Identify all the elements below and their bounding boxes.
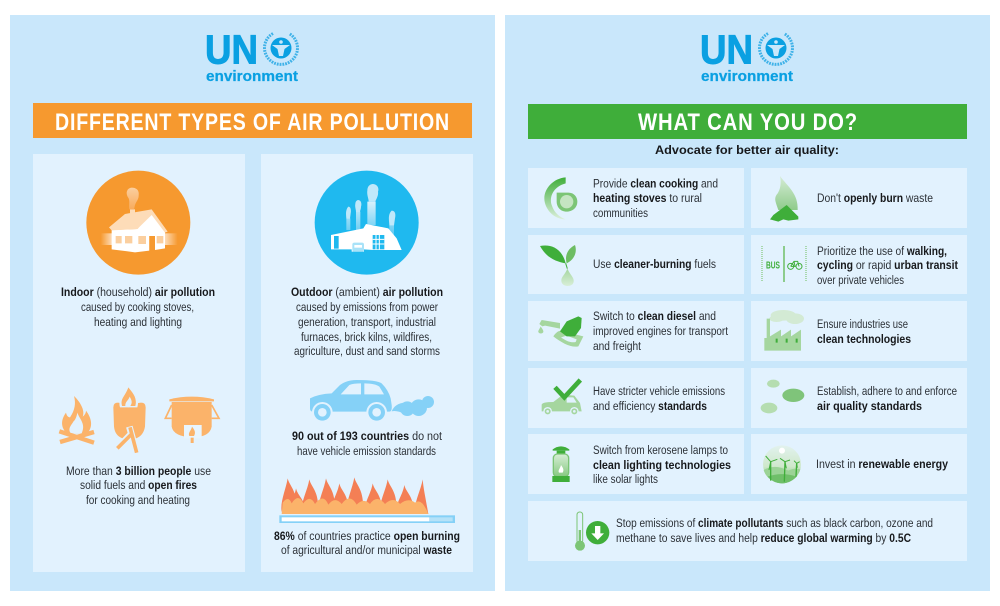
icons: solid fuel fires [59,385,219,453]
icon: bus and bicycle lanes: BUS [766,260,780,271]
action card: renewable energy [751,434,967,494]
text: open burning: 86% of countries practice open burning [274,529,460,543]
action card: walking and cycling [751,235,967,294]
action card: clean diesel: Switch to clean diesel and [593,309,716,323]
text: indoor air pollution [61,285,215,329]
text: open burning [274,529,460,557]
action card: renewable energy: Invest in renewable energy [816,457,948,471]
action card: clean lighting: Switch from kerosene lamps to [593,443,728,457]
icon: factory in blue circle [315,171,419,275]
icon: fuel nozzle [538,316,583,347]
text: open burning: of agricultural and/or municipal waste [281,543,452,557]
icon: factory [764,310,804,351]
UN environment logo: environment [701,68,793,85]
text: 3 billion people: More than 3 billion people use [66,464,211,478]
icon: clean stove [544,177,577,219]
text: outdoor air pollution: furnaces, brick kilns, wildfires, [301,330,432,344]
icon: stove with flame [113,385,146,453]
text: 3 billion people: for cooking and heating [86,493,190,507]
text: 3 billion people: solid fuels and open fires [80,478,197,492]
text: outdoor air pollution: agriculture, dust and sand storms [294,344,440,358]
icon: flames on progress bar [279,477,455,523]
text: indoor air pollution: caused by cooking stoves, [81,300,194,314]
heading banner: different types of air pollution [33,103,472,138]
subheading: advocate: Advocate for better air quality: [655,143,839,157]
panel: outdoor air pollution [261,154,473,572]
UN environment logo [205,26,298,85]
action card: air quality standards [751,368,967,428]
action card: clean diesel: and freight [593,339,642,353]
action card: climate pollutants: Stop emissions of climate pollutants such as black carbon, ozone and [616,516,933,530]
action card: air quality standards: Establish, adhere to and enforce [817,384,957,398]
heading banner: different types of air pollution: DIFFERENT TYPES OF AIR POLLUTION [55,109,450,136]
text: 3 billion people [66,464,211,507]
action card: air quality standards: air quality standards [817,399,922,413]
icon: burning pile [770,176,798,222]
UN environment logo: UN [700,26,753,72]
action card: vehicle standards: and efficiency standards [593,399,707,413]
icon: clouds [761,380,804,413]
action card: walking and cycling: over private vehicles [817,273,904,287]
action card: clean lighting: clean lighting technologies [593,458,731,472]
action card: open burning [751,168,967,228]
text: vehicle emission standards [292,429,443,458]
icon: campfire [59,396,94,443]
heading banner: what can you do [528,104,967,139]
icon: lantern [552,446,570,482]
icon: cooking pot [165,397,219,443]
action card: climate pollutants [528,501,967,561]
text: indoor air pollution: heating and lighting [94,315,182,329]
text: outdoor air pollution: Outdoor (ambient) air pollution [291,285,443,299]
text: vehicle emission standards: have vehicle emission standards [297,444,436,458]
action card: walking and cycling: Prioritize the use of walking, [817,244,947,258]
action card: vehicle standards: Have stricter vehicle emissions [593,384,725,398]
icon: bus and bicycle lanes [762,246,806,282]
icon: car with exhaust [310,380,434,423]
action card: clean lighting: like solar lights [593,472,658,486]
action card: cleaner fuels [528,235,744,294]
panel: indoor air pollution [33,154,245,572]
text: outdoor air pollution: generation, transport, industrial [298,315,436,329]
action card: clean cooking: Provide clean cooking and [593,176,718,190]
text: indoor air pollution: Indoor (household) air pollution [61,285,215,299]
text: outdoor air pollution: caused by emissions from power [296,300,438,314]
UN environment logo [700,26,793,85]
icon: leaves and drop [540,245,576,286]
action card: cleaner fuels: Use cleaner-burning fuels [593,257,716,271]
UN environment logo: UN [205,26,258,72]
action card: clean cooking: heating stoves to rural [593,191,702,205]
text: outdoor air pollution [291,285,443,358]
UN environment logo: environment [206,68,298,85]
action card: clean technologies [751,301,967,361]
action card: walking and cycling: cycling or rapid urban transit [817,258,958,272]
icon: thermometer with down arrow [575,512,609,551]
icon: house in orange circle [86,171,190,275]
panel: what can you do [505,15,990,591]
action card: clean diesel [528,301,744,361]
action card: clean lighting [528,434,744,494]
action card: climate pollutants: methane to save lives and help reduce global warming by 0.5C [616,531,911,545]
action card: clean diesel: improved engines for transport [593,324,728,338]
icon: car with check mark [542,380,582,416]
text: vehicle emission standards: 90 out of 193 countries do not [292,429,443,443]
icon: wind turbines globe [763,445,801,483]
action card: clean cooking [528,168,744,228]
panel: different types of air pollution [10,15,495,591]
action card: clean technologies: Ensure industries use [817,317,908,331]
action card: clean technologies: clean technologies [817,332,911,346]
action card: clean cooking: communities [593,206,648,220]
heading banner: what can you do: WHAT CAN YOU DO? [638,109,858,136]
action card: vehicle standards [528,368,744,428]
action card: open burning: Don't openly burn waste [817,191,933,205]
